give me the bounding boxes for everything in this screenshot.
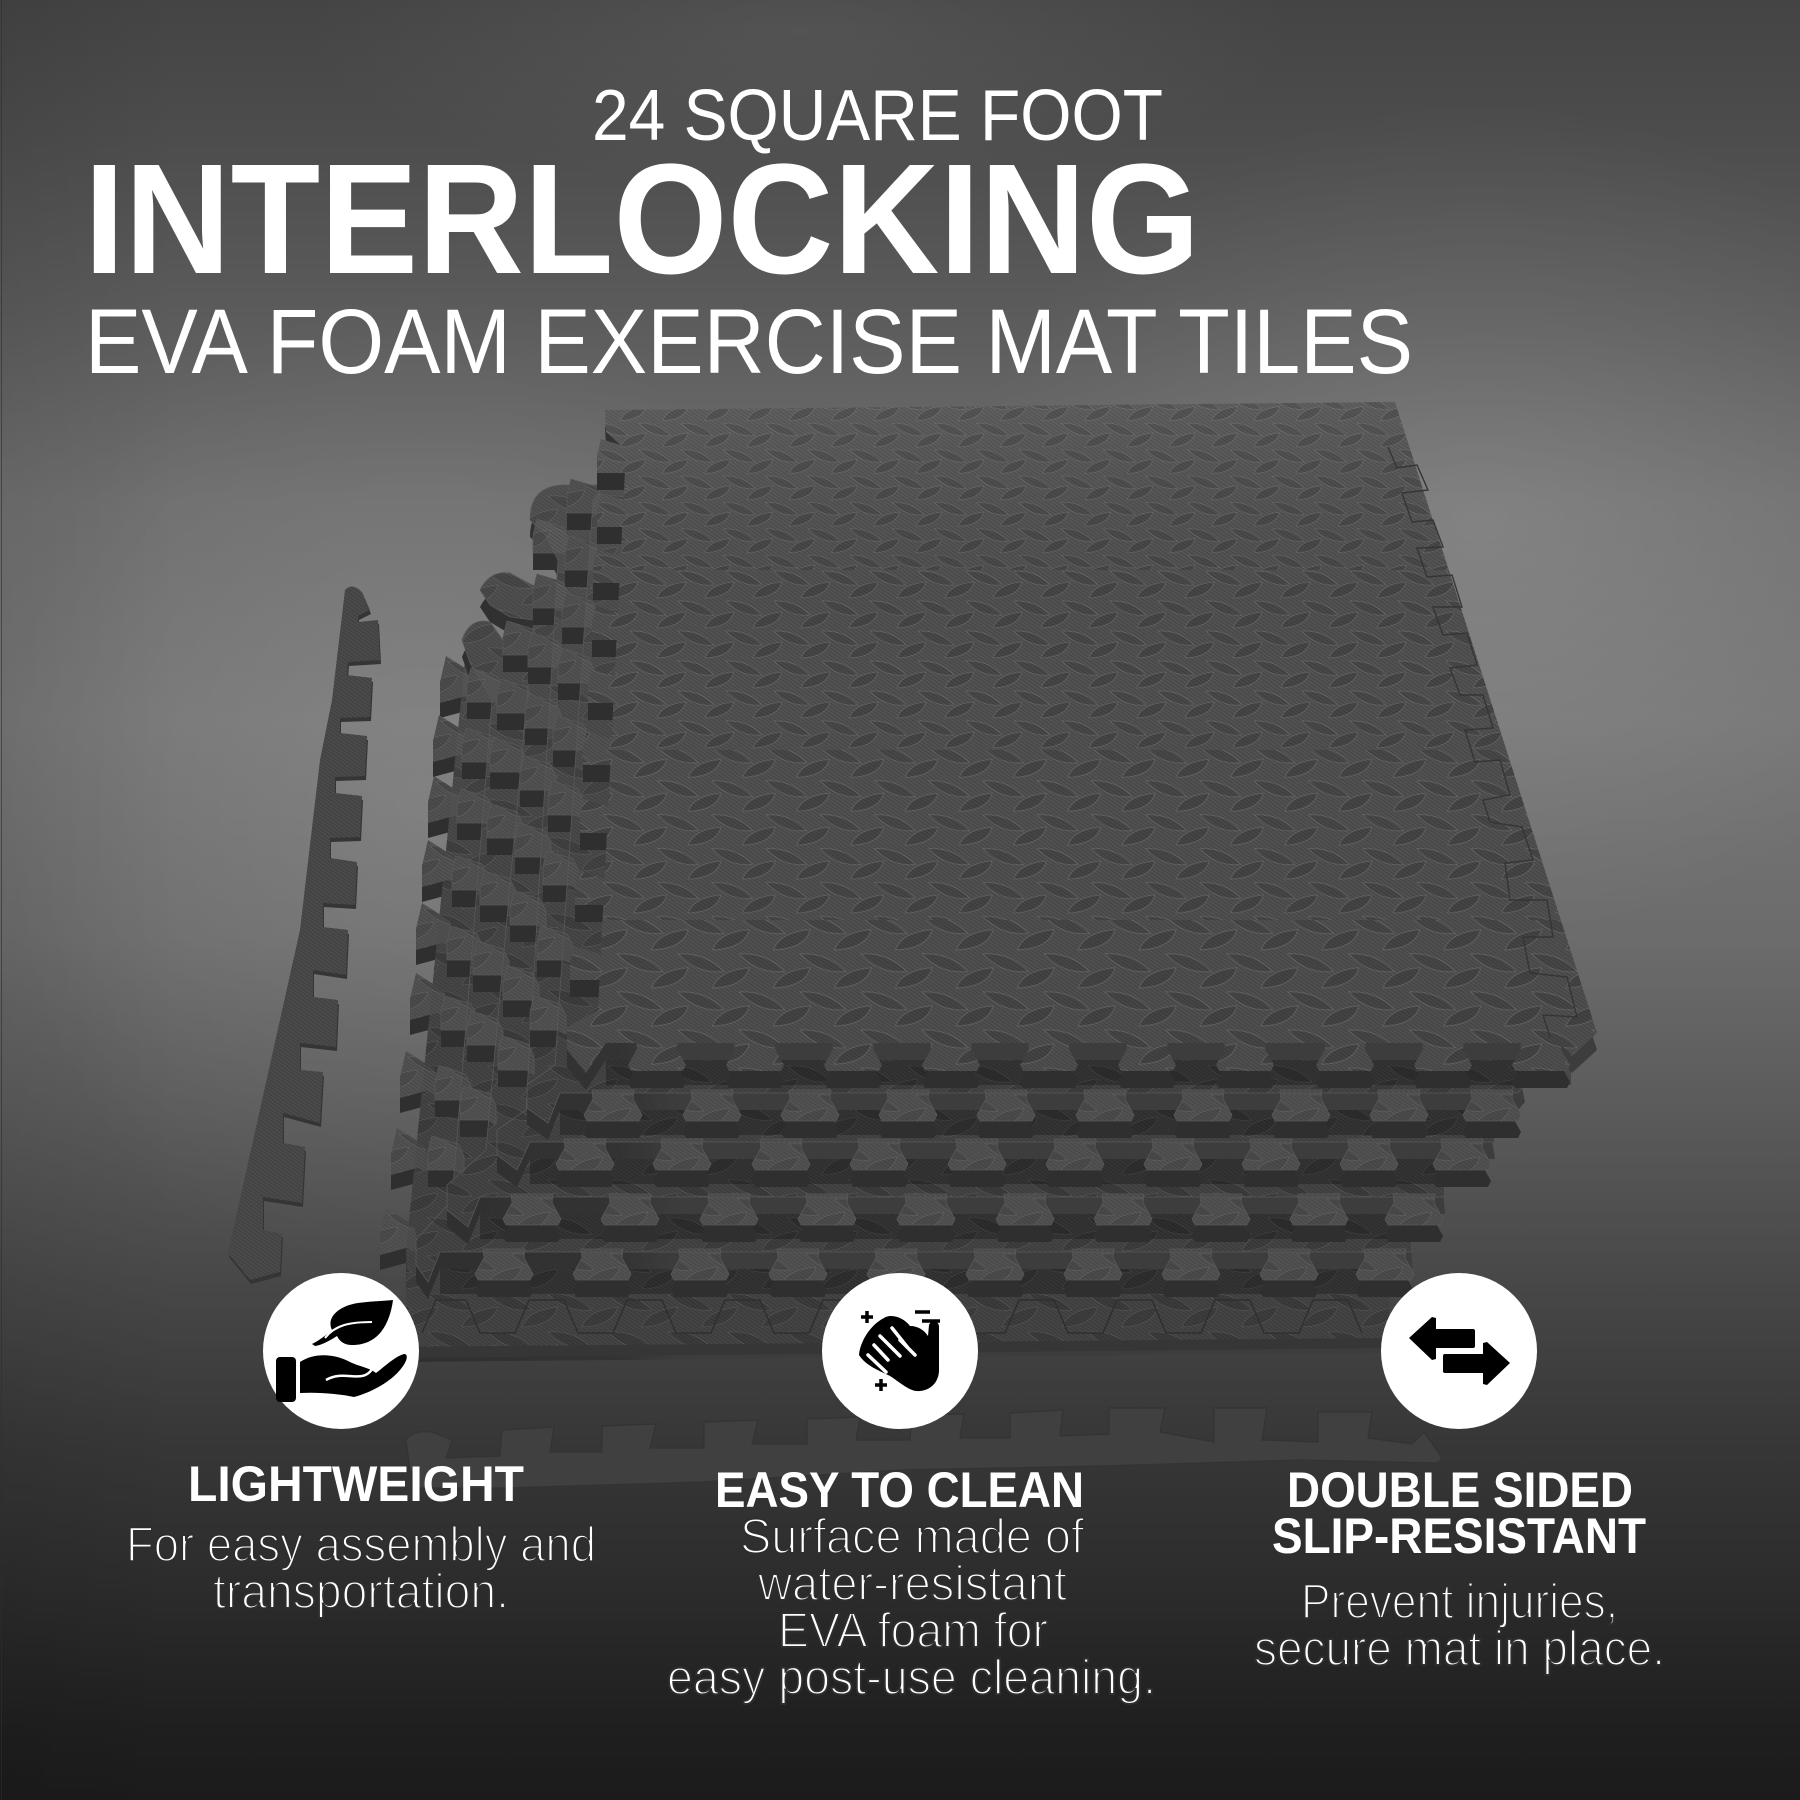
heading: double sided slip-resistant: DOUBLE SIDED (1287, 1462, 1633, 1518)
description: double sided slip-resistant (1254, 1575, 1665, 1676)
title line: 24 square foot: 24 SQUARE FOOT (592, 76, 1163, 156)
heading: lightweight: LIGHTWEIGHT (188, 1456, 524, 1512)
stack layer 3 (497, 485, 1495, 1187)
stack layer 5 (416, 621, 1414, 1299)
description: easy to clean: easy post-use cleaning. (667, 1651, 1156, 1705)
heading: easy to clean: EASY TO CLEAN (715, 1462, 1084, 1518)
heading: double sided slip-resistant (1272, 1462, 1646, 1564)
description: easy to clean (667, 1510, 1156, 1705)
description: lightweight (126, 1518, 596, 1619)
stack layer 2 (527, 479, 1525, 1140)
icon: hand holding leaf (263, 1273, 419, 1429)
engraved puzzle seam on right edge (1388, 447, 1577, 1037)
loose border strip, left (228, 586, 381, 1284)
stacked mat tiles (380, 400, 1620, 1362)
icon: washing hands (822, 1273, 978, 1429)
stack layer 4 (447, 573, 1445, 1244)
description: double sided slip-resistant: secure mat in place. (1254, 1622, 1665, 1676)
heading: double sided slip-resistant: SLIP-RESISTANT (1272, 1508, 1646, 1564)
icon: opposing arrows (1381, 1273, 1537, 1429)
stack layer 6 (bottom tile) (380, 650, 1400, 1362)
description: easy to clean: Surface made of (740, 1510, 1084, 1564)
stack layer 1 (top tile) (540, 400, 1620, 1090)
feature: double sided slip-resistant (1254, 1273, 1665, 1676)
feature: easy to clean (667, 1273, 1156, 1705)
description: easy to clean: water-resistant (757, 1557, 1067, 1611)
description: double sided slip-resistant: Prevent injuries, (1301, 1575, 1618, 1629)
title line: eva foam exercise mat tiles: EVA FOAM EXERCISE MAT TILES (85, 291, 1413, 393)
left thin edge line (1, 0, 2, 1800)
title (84, 76, 1413, 393)
description: lightweight: transportation. (213, 1565, 509, 1619)
feature: lightweight (126, 1273, 596, 1619)
description: easy to clean: EVA foam for (778, 1604, 1048, 1658)
description: lightweight: For easy assembly and (126, 1518, 596, 1572)
title line: interlocking: INTERLOCKING (84, 132, 1200, 307)
loose border strip, bottom (406, 1408, 1442, 1488)
